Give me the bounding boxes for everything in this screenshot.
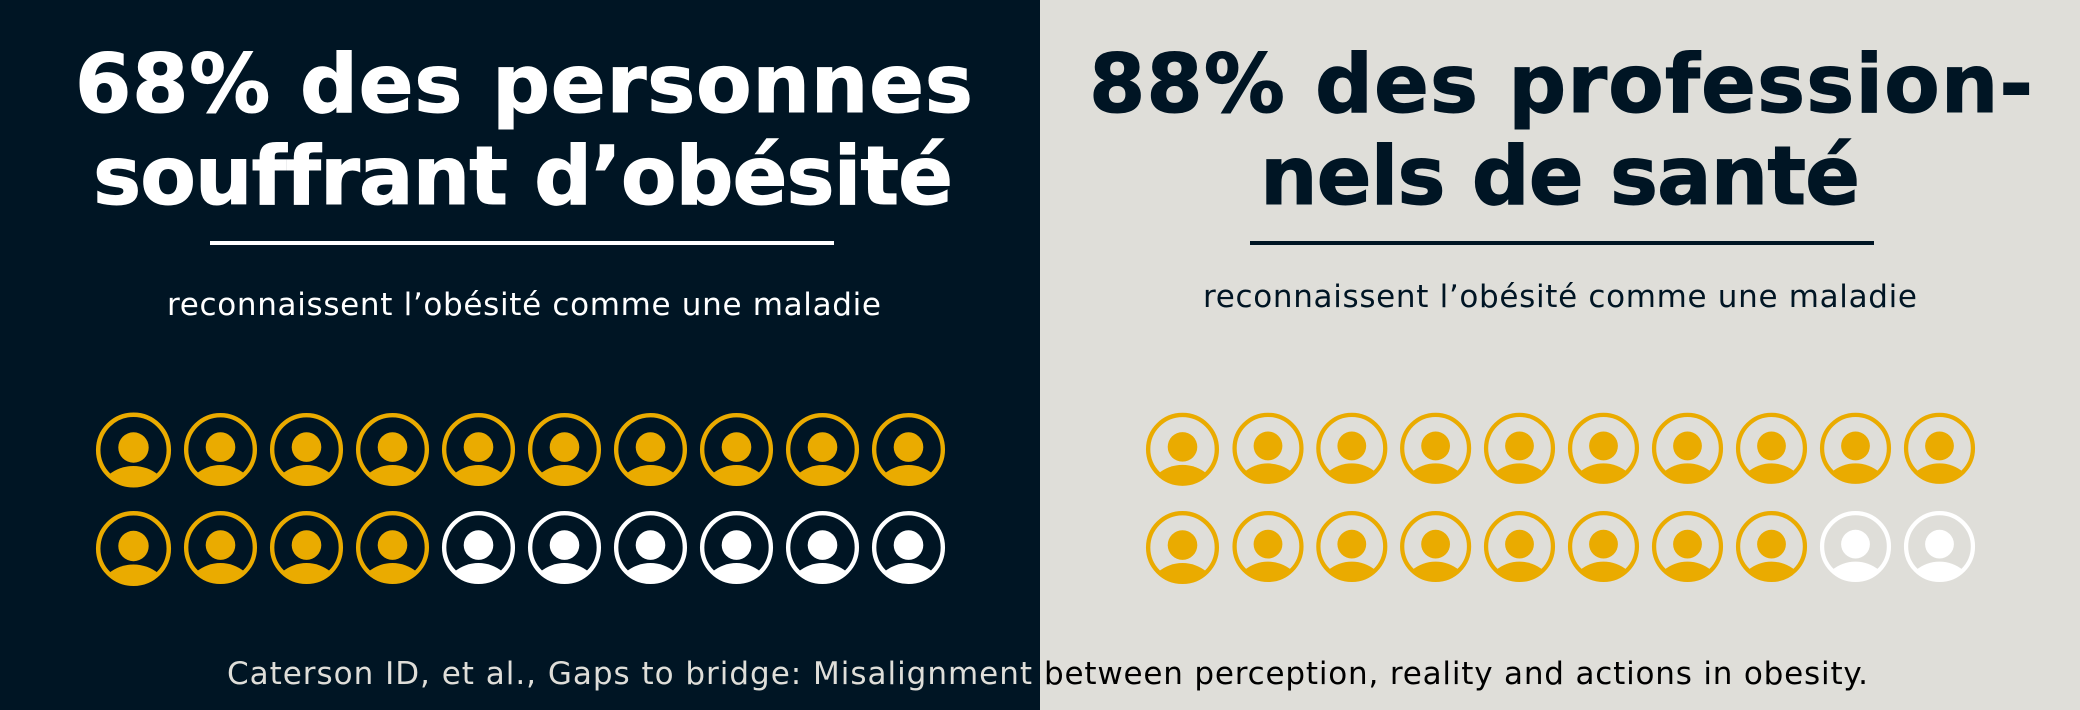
text: left subtitle: reconnaissent l’obésité comme une maladie [167, 287, 881, 323]
panel: professionals [1089, 38, 2033, 582]
icon row: right row 2 [1148, 513, 1973, 582]
icon grid: 68 percent [98, 415, 943, 584]
heading: 88% professionals: 88% des profession- [1089, 38, 2033, 132]
heading: 68% patients [75, 38, 973, 224]
footer: citation: Caterson ID, et al., Gaps to bridge: Misalignment [227, 656, 1032, 692]
icon row: left row 2 [98, 513, 943, 584]
icon row: left row 1 [98, 415, 943, 485]
text: right subtitle: reconnaissent l’obésité comme une maladie [1203, 279, 1917, 315]
icon grid: 88 percent [1148, 415, 1973, 582]
divider: left [210, 241, 834, 245]
footer: citation [227, 656, 1868, 692]
heading: 88% professionals: nels de santé [1260, 130, 1860, 224]
divider: right [1250, 241, 1874, 245]
footer: citation: between perception, reality and actions in obesity. [1044, 656, 1868, 692]
icon row: right row 1 [1148, 415, 1973, 484]
heading: 88% professionals [1089, 38, 2033, 224]
panel: patients [75, 38, 973, 584]
panel: left background [0, 0, 1040, 710]
heading: 68% patients: 68% des personnes [75, 38, 973, 132]
heading: 68% patients: souffrant d’obésité [93, 130, 953, 224]
panel: right background [1040, 0, 2080, 710]
